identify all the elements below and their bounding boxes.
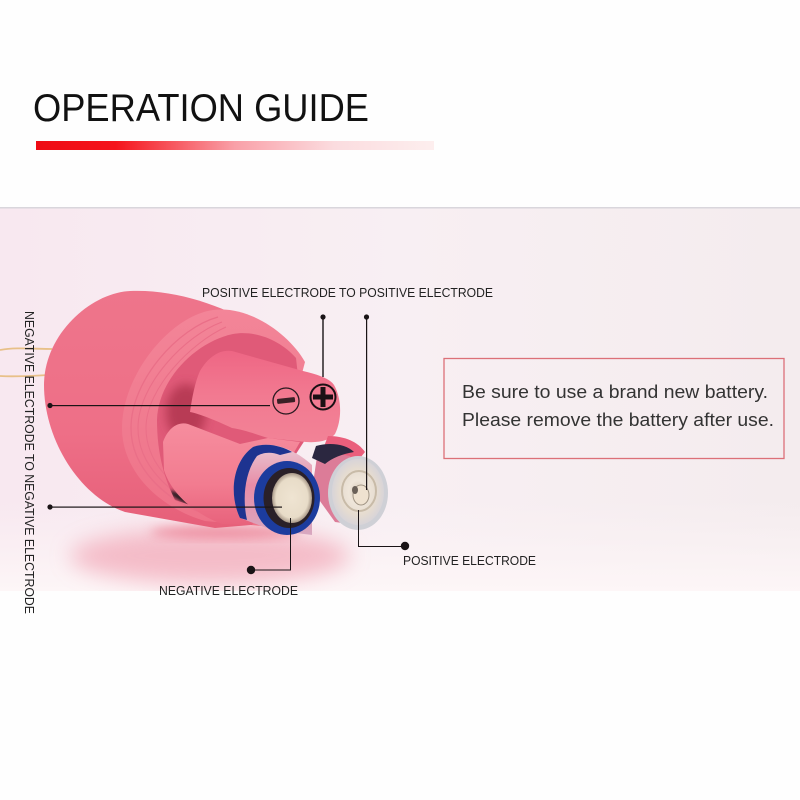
reflection under device: [70, 525, 350, 584]
symbol: minus: [273, 388, 299, 414]
device: pink cap: [44, 291, 298, 528]
device: threaded ring: [122, 309, 305, 526]
label: positive electrode: POSITIVE ELECTRODE: [403, 554, 536, 568]
wires: [0, 348, 52, 376]
callout: battery advice: Please remove the battery after use.: [462, 410, 774, 430]
panel: product photo: [0, 207, 800, 591]
device: upper battery tube: [190, 351, 340, 442]
label: positive to positive: POSITIVE ELECTRODE TO POSITIVE ELECTRODE: [202, 286, 493, 300]
device: lower battery tube: [163, 423, 300, 525]
title: OPERATION GUIDE: [33, 87, 369, 130]
blue battery: [234, 445, 320, 535]
leader lines: [47, 314, 409, 574]
device: battery cavity: [157, 333, 304, 504]
callout: battery advice: [444, 358, 784, 458]
symbol: plus: [310, 384, 336, 410]
silver battery: [312, 444, 388, 530]
callout: battery advice: Be sure to use a brand new battery.: [462, 382, 768, 402]
label: negative to negative: NEGATIVE ELECTRODE TO NEGATIVE ELECTRODE: [22, 311, 36, 614]
back contact tube: [318, 436, 365, 470]
label: negative electrode: NEGATIVE ELECTRODE: [159, 584, 298, 598]
red gradient title bar: [36, 141, 434, 150]
